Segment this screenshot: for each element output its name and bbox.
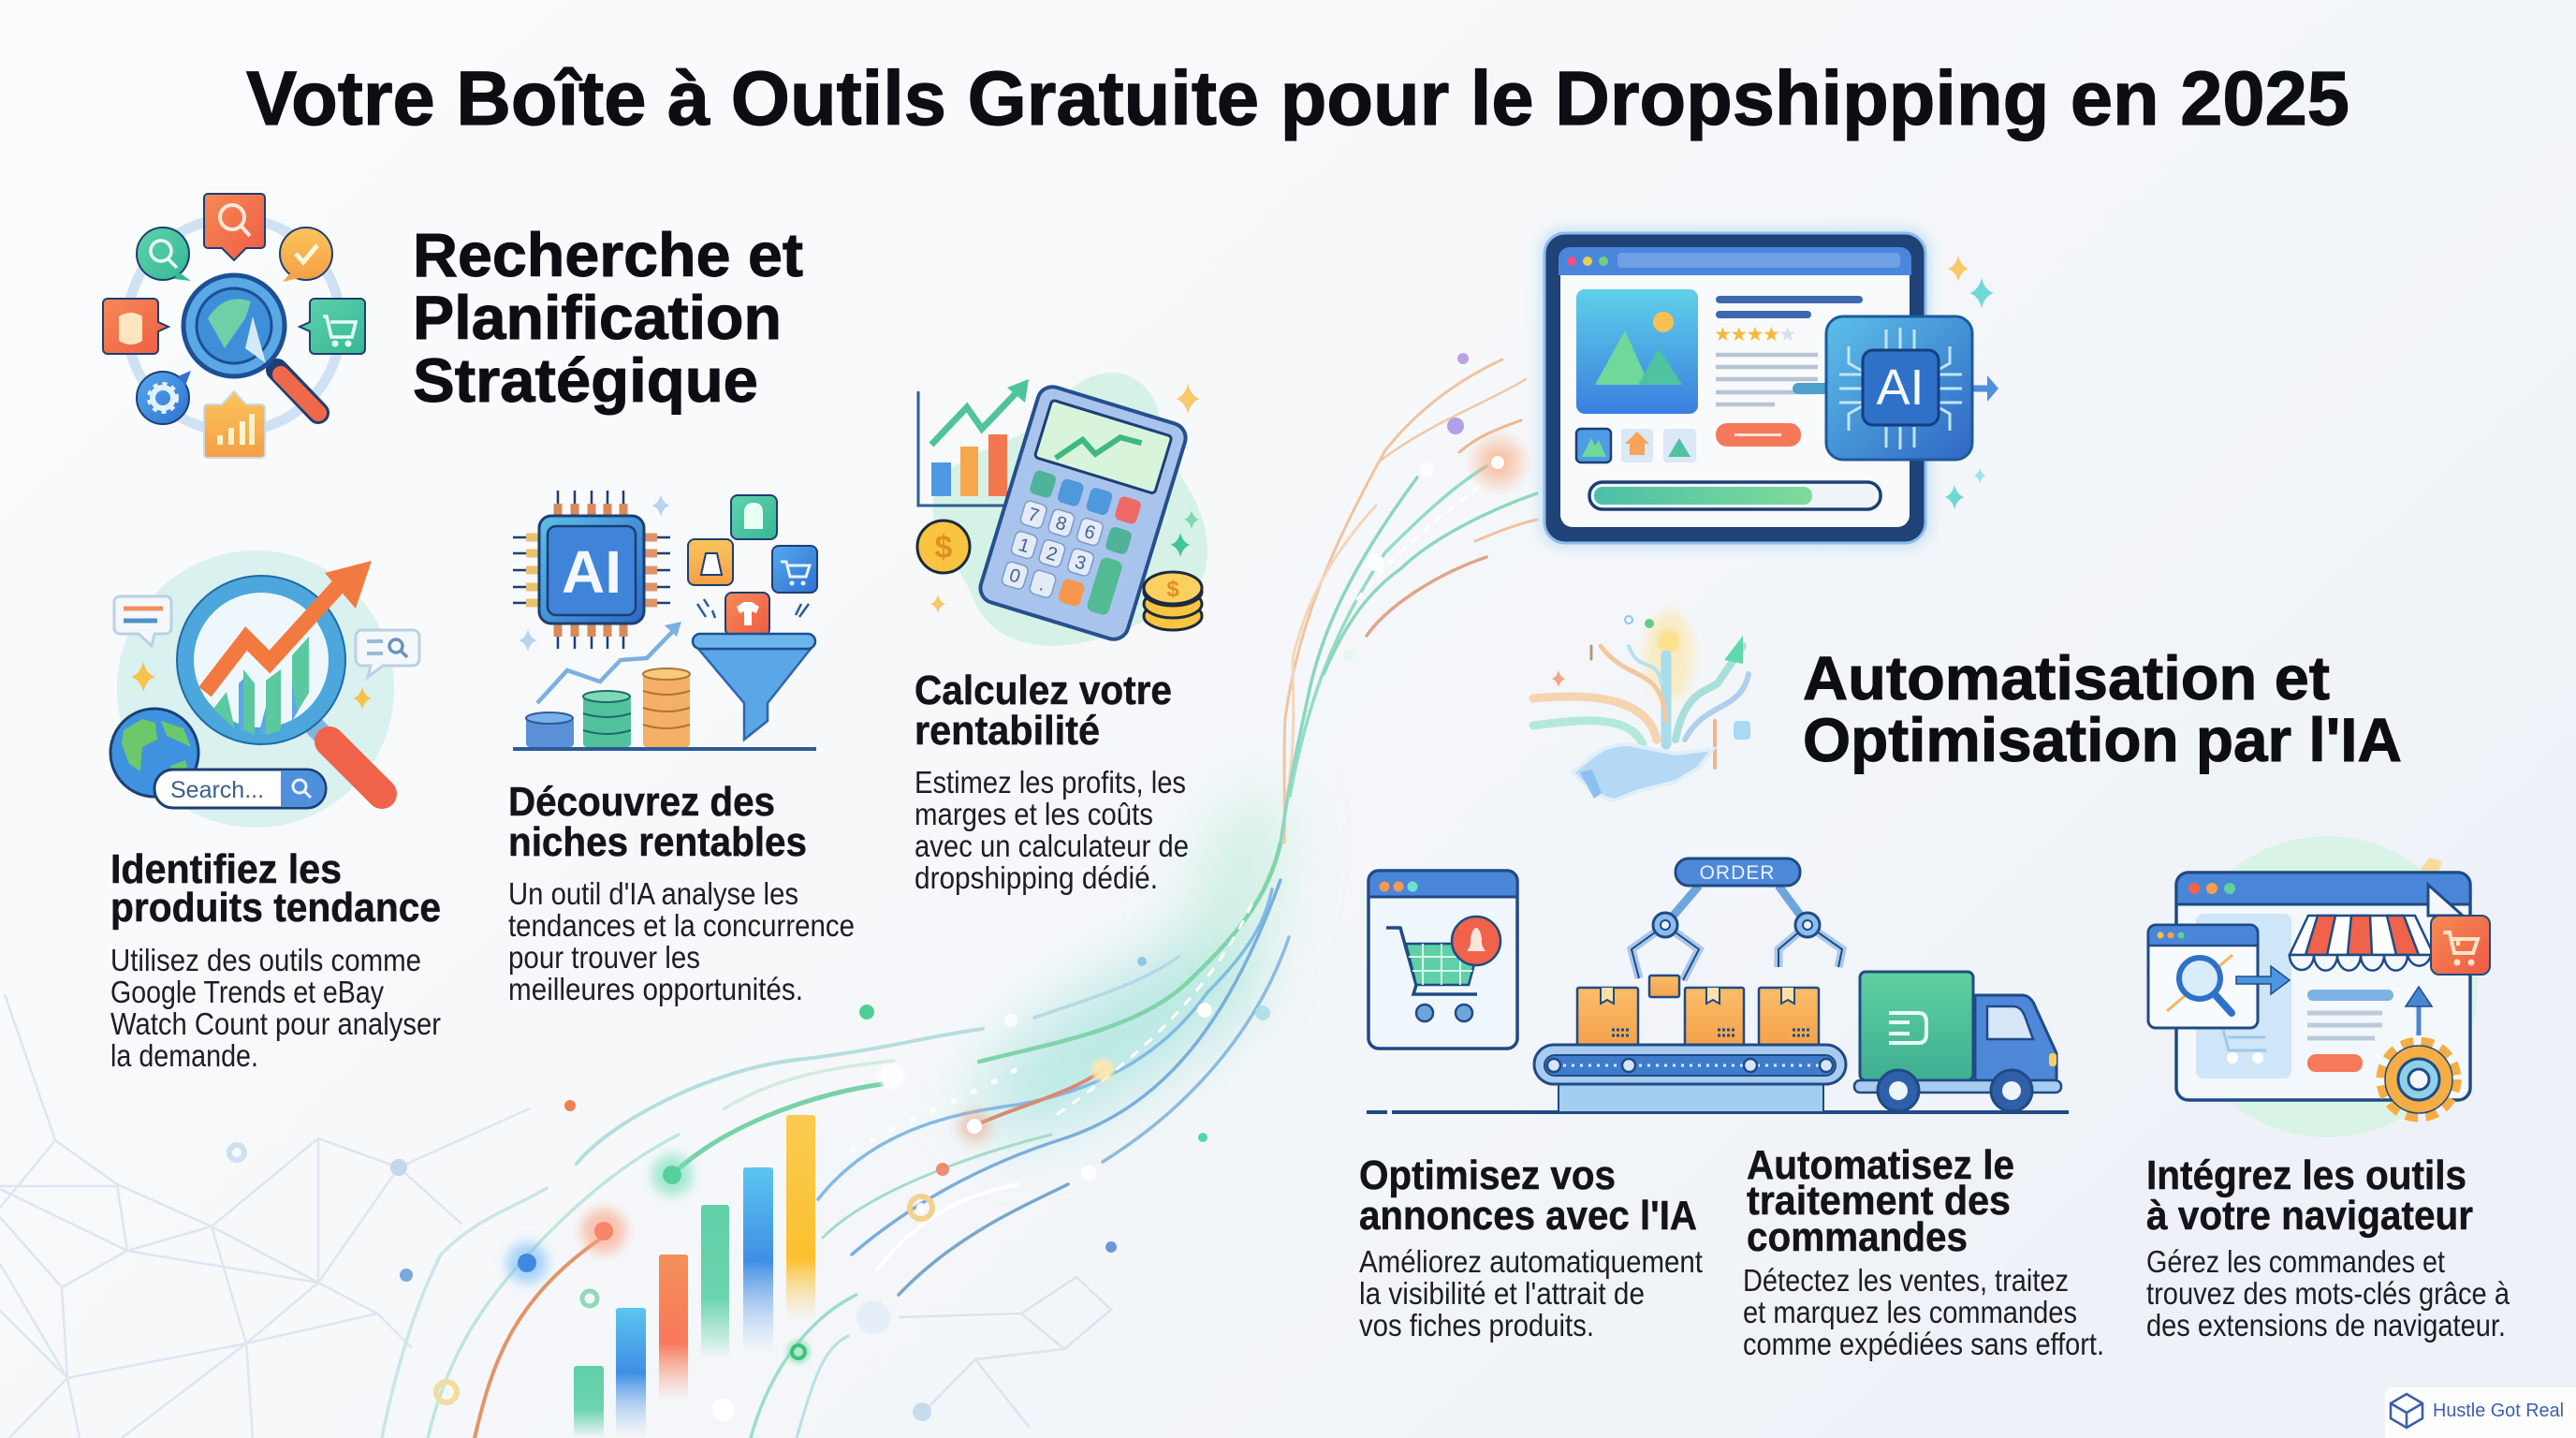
body: optimise listings with AI: Améliorez automatiquement	[1359, 1244, 1703, 1279]
keypad digits: 1	[1016, 535, 1032, 557]
body: calculate profitability: Estimez les profits, les	[915, 765, 1186, 800]
title: Votre Boîte à Outils Gratuite pour le Dropshipping en 2025	[246, 56, 2349, 141]
heading: automate order processing: Automatisez le	[1747, 1142, 2014, 1188]
heading: calculate profitability: Calculez votre	[915, 668, 1172, 713]
icon: delivery truck	[1854, 972, 2061, 1111]
body: identify trending products: Watch Count pour analyser	[110, 1006, 441, 1041]
icon: hand with AI streams	[1533, 610, 1750, 800]
flowing data streams	[382, 360, 1537, 1438]
heading: integrate browser tools: à votre navigateur	[2146, 1193, 2473, 1239]
AI chip label: AI	[1876, 360, 1925, 416]
body: discover profitable niches	[508, 876, 855, 1006]
rating stars: ★★★★★	[1714, 324, 1795, 345]
icon: cube logo	[2391, 1394, 2422, 1428]
icon: research cluster	[103, 194, 365, 458]
heading: discover profitable niches: Découvrez des	[508, 779, 775, 825]
body: calculate profitability	[915, 765, 1189, 895]
body: discover profitable niches: pour trouver les	[508, 940, 700, 975]
keypad digits: 0	[1007, 565, 1023, 588]
chip label: AI	[562, 538, 622, 606]
keypad digits: 2	[1044, 543, 1060, 565]
heading: discover profitable niches	[508, 779, 807, 865]
icon: parcels	[1577, 976, 1819, 1045]
body: automate order processing: Détectez les ventes, traitez	[1743, 1263, 2069, 1298]
icon: AI chip and funnel	[513, 491, 817, 749]
heading: identify trending products: Identifiez les	[110, 846, 342, 892]
body: optimise listings with AI: la visibilité et l'attrait de	[1359, 1276, 1645, 1311]
heading: research and strategic planning	[413, 220, 803, 415]
heading: optimise listings with AI: Optimisez vos	[1359, 1152, 1616, 1198]
body: calculate profitability: dropshipping dédié.	[915, 860, 1158, 895]
body: identify trending products: la demande.	[110, 1038, 258, 1073]
body: optimise listings with AI: vos fiches produits.	[1359, 1308, 1594, 1343]
body: integrate browser tools: des extensions de navigateur.	[2146, 1308, 2506, 1343]
body: calculate profitability: marges et les coûts	[915, 797, 1153, 831]
heading: automate order processing: traitement des	[1747, 1178, 2011, 1224]
body: automate order processing	[1743, 1263, 2104, 1361]
watermark badge	[2385, 1387, 2576, 1438]
icon: browser shop and gear	[2148, 836, 2490, 1137]
heading: discover profitable niches: niches rentables	[508, 819, 807, 865]
body: calculate profitability: avec un calculateur de	[915, 829, 1189, 863]
body: automate order processing: comme expédiées sans effort.	[1743, 1327, 2104, 1361]
glowing particles	[229, 353, 1532, 1421]
icon: trend magnifier	[110, 550, 419, 828]
heading: research and strategic planning: Planification	[413, 283, 782, 352]
body: identify trending products: Google Trends et eBay	[110, 975, 384, 1009]
coin symbol: $	[935, 530, 953, 565]
heading: automation and AI optimization: Optimisation par l'IA	[1803, 705, 2402, 774]
keypad digits: 3	[1073, 551, 1089, 575]
icon: ground line	[1367, 1110, 2069, 1114]
network pattern: bottom right	[899, 1277, 1111, 1428]
body: integrate browser tools	[2146, 1244, 2510, 1343]
card: automate order processing	[1743, 1142, 2104, 1361]
heading: calculate profitability: rentabilité	[915, 708, 1100, 754]
body: identify trending products: Utilisez des outils comme	[110, 943, 421, 977]
heading: calculate profitability	[915, 668, 1172, 754]
illustration: conveyor, robot arm and truck	[1367, 858, 2069, 1112]
body: integrate browser tools: Gérez les commandes et	[2146, 1244, 2445, 1279]
icon: robot arm	[1632, 858, 1842, 980]
heading: automation and AI optimization: Automatisation et	[1803, 643, 2330, 712]
network pattern: bottom left	[0, 994, 530, 1438]
card: discover profitable niches	[508, 491, 855, 1006]
body: automate order processing: et marquez les commandes	[1743, 1295, 2077, 1329]
heading: optimise listings with AI: annonces avec l'IA	[1359, 1193, 1697, 1239]
order label: ORDER	[1700, 862, 1775, 884]
section: automation and AI optimization	[1533, 610, 2402, 800]
card: integrate browser tools	[2146, 836, 2510, 1343]
keypad digits	[1007, 504, 1098, 605]
body: discover profitable niches: meilleures opportunités.	[508, 972, 803, 1006]
growth bars	[574, 1115, 815, 1438]
section: research and strategic planning	[103, 194, 803, 458]
card: identify trending products	[110, 550, 441, 1073]
heading: identify trending products: produits tendance	[110, 885, 441, 931]
watermark text: Hustle Got Real	[2433, 1401, 2564, 1421]
body: discover profitable niches: Un outil d'IA analyse les	[508, 876, 798, 911]
heading: research and strategic planning: Recherche et	[413, 220, 803, 289]
heading: research and strategic planning: Stratégique	[413, 345, 758, 415]
heading: automate order processing: commandes	[1747, 1214, 1968, 1260]
icon: cart window	[1368, 871, 1517, 1049]
heading: integrate browser tools	[2146, 1152, 2473, 1239]
body: optimise listings with AI	[1359, 1244, 1703, 1343]
keypad digits: 6	[1082, 521, 1098, 544]
keypad digits: .	[1037, 574, 1048, 595]
illustration: product page with AI chip	[1539, 227, 1998, 549]
heading: integrate browser tools: Intégrez les outils	[2146, 1152, 2466, 1198]
body: integrate browser tools: trouvez des mots-clés grâce à	[2146, 1276, 2510, 1311]
card: optimise listings with AI	[1359, 871, 1703, 1343]
body: discover profitable niches: tendances et la concurrence	[508, 908, 855, 943]
card: calculate profitability	[915, 373, 1208, 895]
coin stack symbol: $	[1166, 577, 1179, 602]
heading: automate order processing	[1747, 1142, 2014, 1260]
body: identify trending products	[110, 943, 441, 1073]
heading: automation and AI optimization	[1803, 643, 2402, 774]
keypad digits: 8	[1053, 513, 1069, 536]
icon: calculator	[917, 373, 1208, 646]
keypad digits: 7	[1025, 504, 1041, 527]
icon: conveyor belt	[1534, 1045, 1846, 1112]
heading: identify trending products	[110, 846, 441, 931]
heading: optimise listings with AI	[1359, 1152, 1697, 1239]
search box label: Search...	[170, 777, 264, 803]
